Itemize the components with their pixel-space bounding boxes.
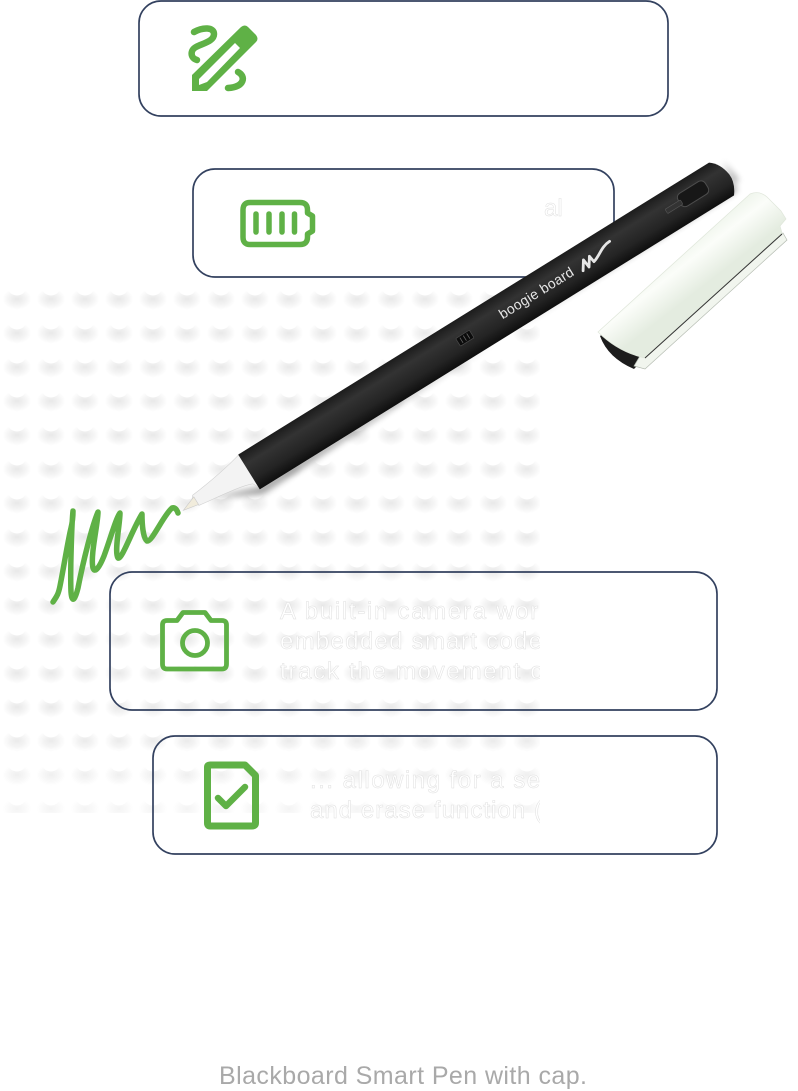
grille — [456, 330, 474, 346]
erase function text — [310, 770, 540, 824]
caption: Blackboard Smart Pen with cap. — [219, 1062, 587, 1090]
icon: battery — [243, 202, 312, 244]
panel: document card — [153, 736, 717, 854]
cap clip lip — [634, 233, 787, 369]
camera description text: embedded smart code — [280, 628, 542, 655]
text fragment: al — [544, 195, 563, 222]
camera description text — [280, 601, 540, 680]
icon: camera — [162, 612, 226, 669]
camera description text: A built-in camera work — [280, 598, 553, 625]
panel: battery card — [193, 169, 614, 277]
green scribble — [53, 508, 178, 602]
brand name: boogie board — [496, 264, 576, 322]
erase function text: and erase function ( — [310, 797, 542, 824]
erase function text: ... allowing for a sea — [310, 767, 556, 794]
icon: pencil with squiggle — [192, 26, 258, 91]
cap — [598, 193, 787, 369]
pen tip — [174, 454, 262, 529]
background dot pattern — [0, 278, 540, 813]
switch — [662, 179, 711, 217]
pen — [174, 154, 747, 534]
pen body — [238, 157, 740, 489]
cap opening — [600, 332, 650, 369]
pen shadow — [199, 160, 747, 520]
panel: camera card — [110, 572, 717, 710]
icon: document with check — [208, 765, 256, 826]
cap barrel — [598, 193, 786, 358]
panel: top card — [139, 1, 668, 116]
brand logo — [577, 241, 615, 271]
camera description text: track the movement of — [280, 658, 552, 685]
